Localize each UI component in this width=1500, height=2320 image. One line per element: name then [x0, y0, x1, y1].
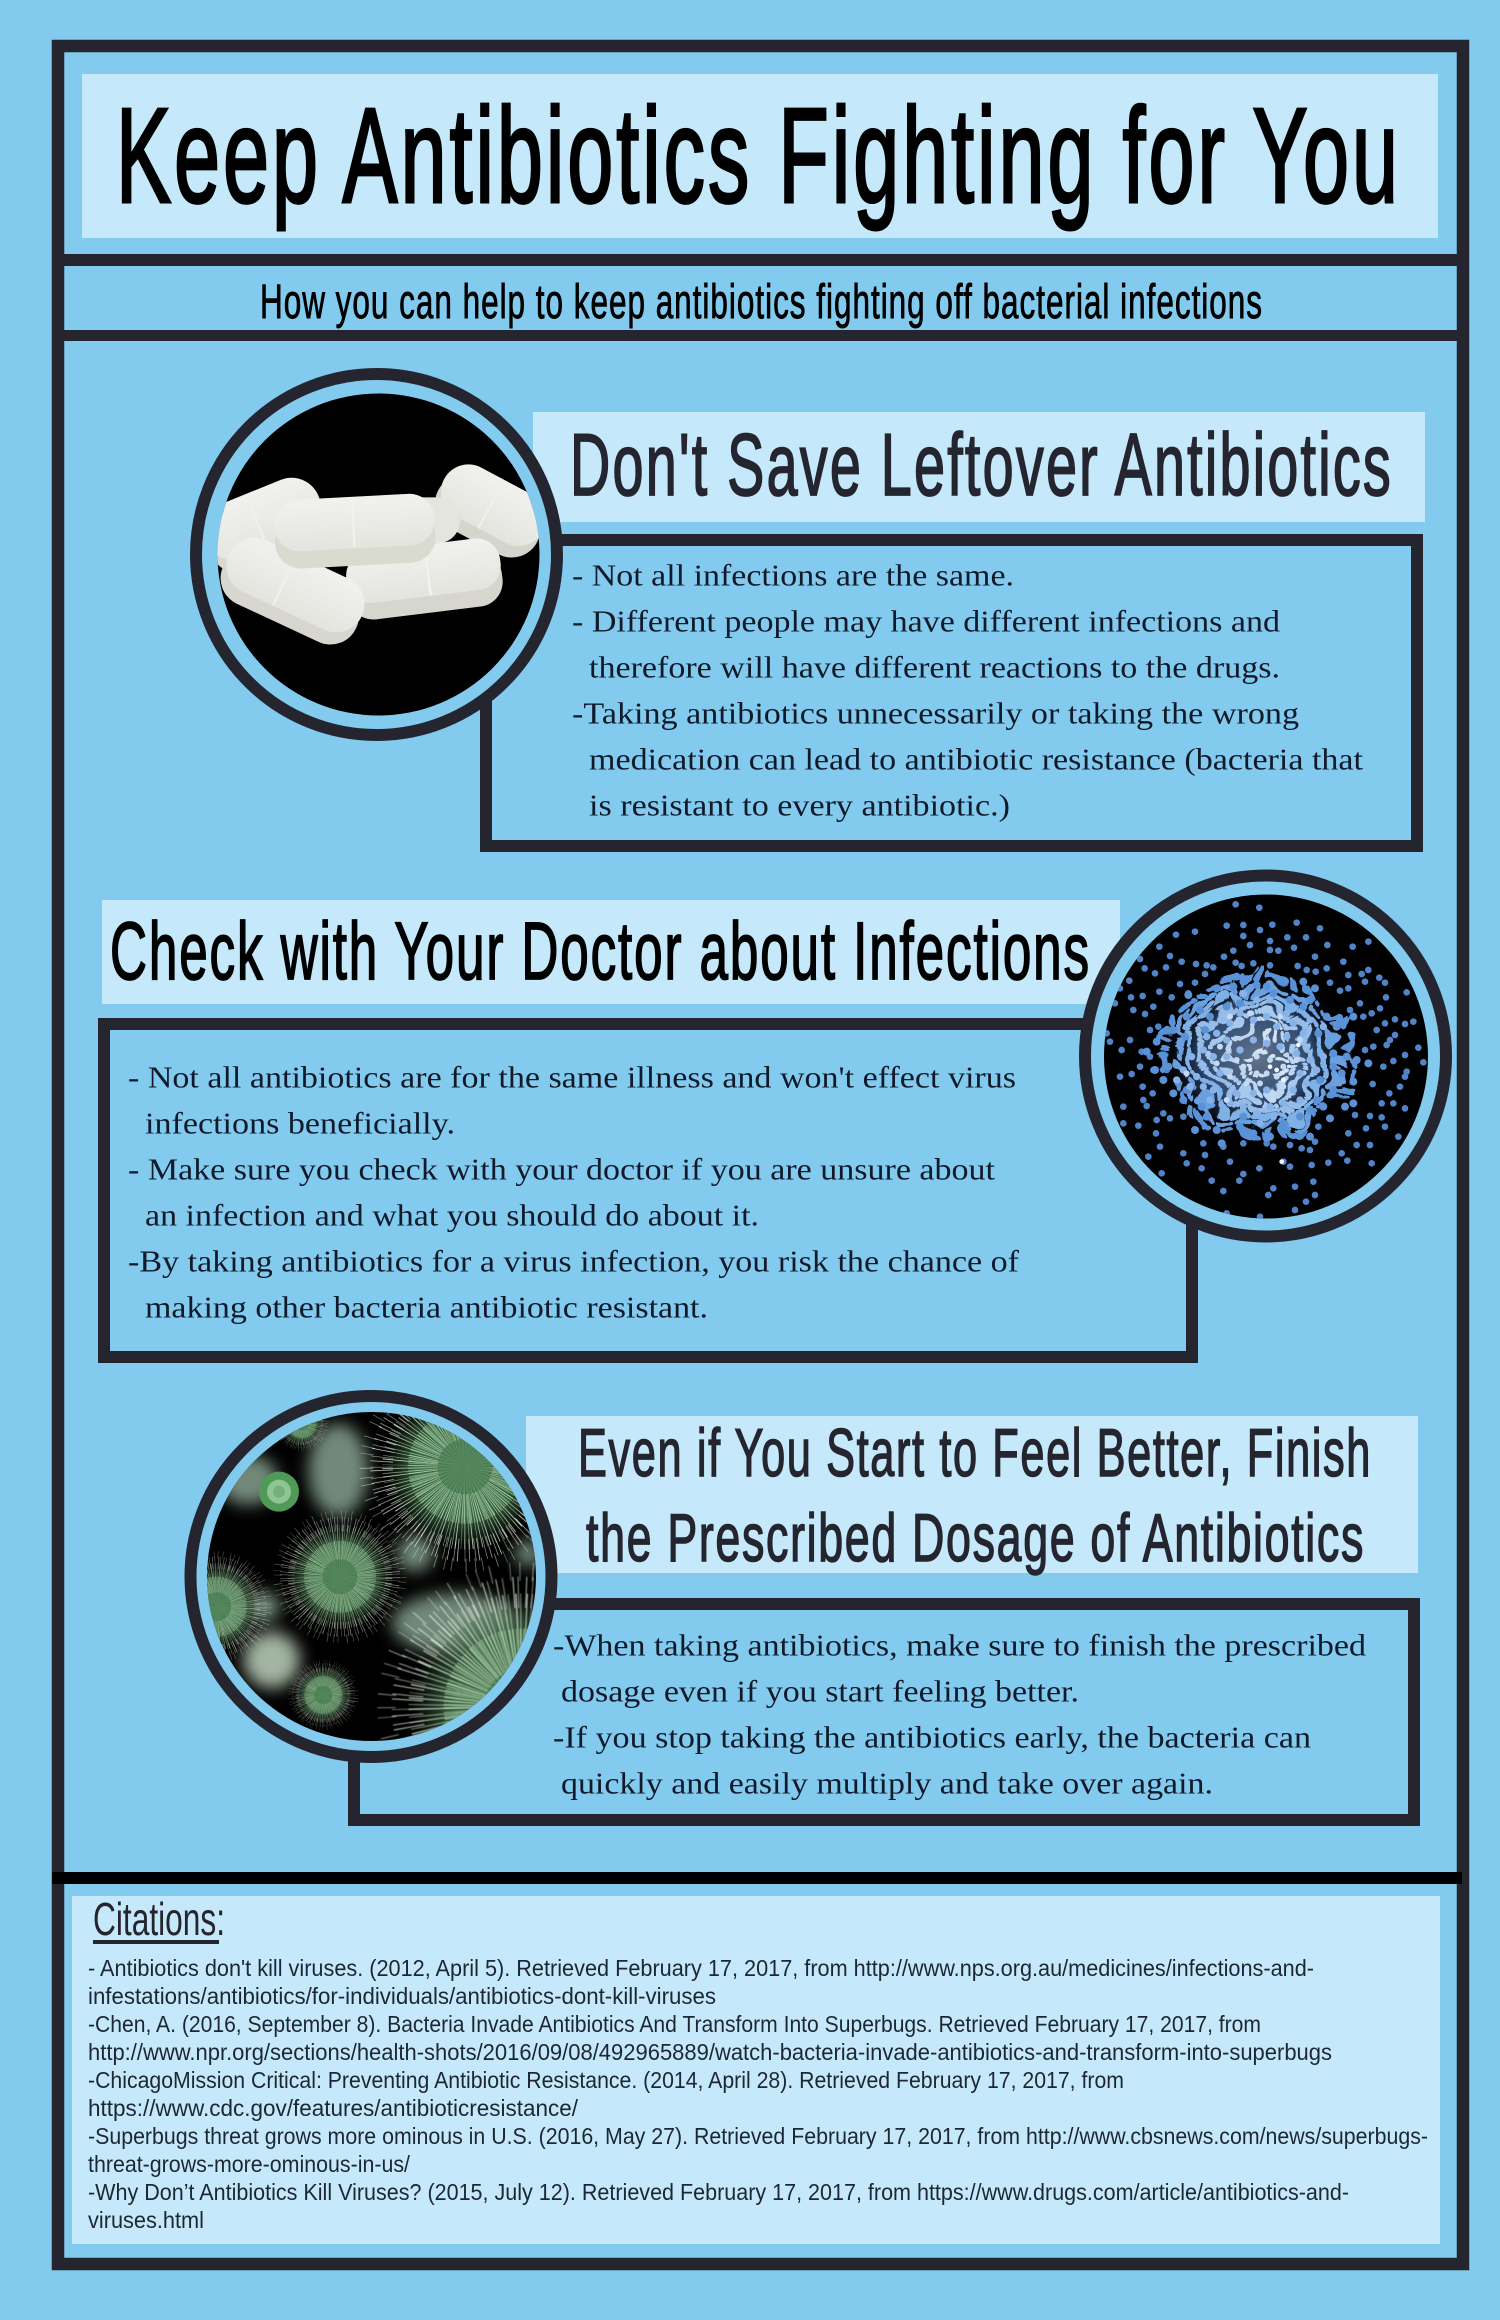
- text box outline: [354, 1604, 1414, 1820]
- body text: don't save: medication can lead to antibiotic resistance (bacteria that: [589, 742, 1363, 776]
- panel: check with your doctor: [102, 876, 1446, 1357]
- citations heading: Citations:: [93, 1893, 225, 1945]
- panel: citations: [72, 1893, 1440, 2244]
- body text: don't save: - Different people may have different infections and: [572, 604, 1281, 638]
- citations list: https://www.cdc.gov/features/antibioticresistance/: [88, 2095, 579, 2121]
- body text: finish the prescribed dosage: [553, 1628, 1367, 1800]
- citations list: -ChicagoMission Critical: Preventing Antibiotic Resistance. (2014, April 28). Retrieved February 17, 2017, from: [88, 2067, 1124, 2093]
- body text: don't save: therefore will have different reactions to the drugs.: [589, 650, 1280, 684]
- body text: don't save: - Not all infections are the same.: [572, 558, 1014, 592]
- body text: check with your doctor: infections beneficially.: [145, 1106, 455, 1140]
- citations list: -Why Don’t Antibiotics Kill Viruses? (2015, July 12). Retrieved February 17, 2017, from https://www.drugs.com/article/antibiotics-and-: [88, 2179, 1349, 2205]
- body text: check with your doctor: making other bacteria antibiotic resistant.: [145, 1290, 708, 1324]
- text box outline: [486, 540, 1417, 846]
- body text: check with your doctor: - Not all antibiotics are for the same illness and won't effect virus: [128, 1060, 1016, 1094]
- heading: check with your doctor: [102, 900, 1120, 1004]
- circular photo: green spiky bacteria: [184, 1390, 558, 1763]
- body text: finish the prescribed dosage: quickly and easily multiply and take over again.: [561, 1766, 1213, 1800]
- body text: check with your doctor: -By taking antibiotics for a virus infection, you risk the chance of: [128, 1244, 1020, 1278]
- body text: finish the prescribed dosage: dosage even if you start feeling better.: [561, 1674, 1079, 1708]
- citations list: - Antibiotics don't kill viruses. (2012, April 5). Retrieved February 17, 2017, from http://www.nps.org.au/medicines/infections-and-: [88, 1955, 1314, 1981]
- body text: don't save: is resistant to every antibiotic.): [589, 788, 1010, 822]
- heading: finish the prescribed dosage: [526, 1415, 1418, 1576]
- citations list: http://www.npr.org/sections/health-shots/2016/09/08/492965889/watch-bacteria-invade-antibiotics-and-transform-into-superbugs: [88, 2039, 1332, 2065]
- body text: finish the prescribed dosage: -When taking antibiotics, make sure to finish the prescribed: [553, 1628, 1367, 1662]
- panel: don't save leftover antibiotics: [195, 374, 1425, 846]
- citations list: threat-grows-more-ominous-in-us/: [88, 2151, 411, 2177]
- body text: check with your doctor: an infection and what you should do about it.: [145, 1198, 759, 1232]
- text box outline: [104, 1024, 1192, 1357]
- citations list: -Superbugs threat grows more ominous in U.S. (2016, May 27). Retrieved February 17, 2017, from http://www.cbsnews.com/news/superbugs-: [88, 2123, 1428, 2149]
- citations list: infestations/antibiotics/for-individuals/antibiotics-dont-kill-viruses: [88, 1983, 716, 2009]
- circular photo: white pills: [195, 374, 557, 735]
- panel: finish the prescribed dosage: [184, 1390, 1420, 1826]
- body text: check with your doctor: [128, 1060, 1020, 1324]
- body text: check with your doctor: - Make sure you check with your doctor if you are unsure about: [128, 1152, 995, 1186]
- body text: don't save: -Taking antibiotics unnecessarily or taking the wrong: [572, 696, 1299, 730]
- body text: finish the prescribed dosage: -If you stop taking the antibiotics early, the bacteria can: [553, 1720, 1312, 1754]
- citations list: -Chen, A. (2016, September 8). Bacteria Invade Antibiotics And Transform Into Superbugs. Retrieved February 17, 2017, from: [88, 2011, 1261, 2037]
- circular photo: blue bacteria cluster: [1085, 876, 1446, 1236]
- body text: don't save: [572, 558, 1363, 822]
- citations list: viruses.html: [88, 2207, 204, 2233]
- citations list: [88, 1955, 1428, 2233]
- citations heading: [93, 1893, 225, 1945]
